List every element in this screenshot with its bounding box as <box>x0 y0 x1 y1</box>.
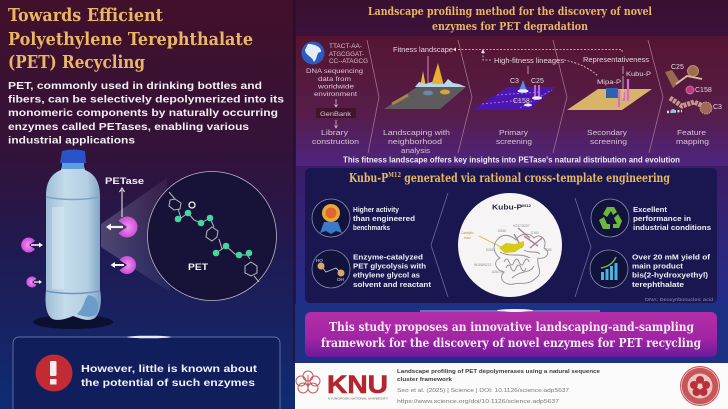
label: PETase <box>105 176 144 217</box>
benefit: glycolysis: OH <box>337 277 344 282</box>
icon: warning <box>36 354 72 392</box>
step: library construction: Library <box>321 128 348 137</box>
callout: little is known <box>13 336 280 409</box>
heading: Kubu-P M12: Kubu-P <box>349 171 388 185</box>
protein structure: Catalytic <box>461 231 474 235</box>
benefit: glycolysis <box>312 250 432 289</box>
icon: PET bottle <box>33 150 113 329</box>
benefit: industrial performance <box>591 199 711 237</box>
benefit: glycolysis: PET glycolysis with <box>353 264 426 270</box>
step: fitness landscape <box>383 47 466 155</box>
step: primary screening: Primary <box>499 128 528 137</box>
logo: KNU wordmark: KYUNGPOOK NATIONAL UNIVERSITY <box>328 396 388 400</box>
logo: university seal <box>680 366 720 406</box>
citation: Seo et al. (2025) | Science | DOI: 10.1126/science.adp5637 <box>397 388 569 394</box>
benefit: yield: main product <box>632 264 684 270</box>
step: library construction: DNA sequencing <box>306 68 363 75</box>
enzyme: PETase left <box>21 238 43 253</box>
step: fitness landscape: Fitness landscape <box>393 47 453 54</box>
panel: Kubu-P M12 <box>305 168 717 303</box>
protein structure: M12 <box>522 203 532 208</box>
benefit: industrial performance: Excellent <box>633 207 668 214</box>
step: primary screening: C3 <box>510 78 519 85</box>
benefit: yield: terephthalate <box>632 282 684 289</box>
heading: landscape profiling: enzymes for PET degradation <box>432 19 589 33</box>
conclusion band <box>295 304 728 363</box>
magnified PET molecule <box>148 172 276 300</box>
protein structure: T365 <box>544 248 552 252</box>
enzyme: PETase upper <box>106 217 138 238</box>
panel: right background <box>295 0 728 409</box>
title <box>8 5 253 73</box>
step: primary screening: C25 <box>531 78 544 85</box>
step: secondary screening: Mipa-P <box>597 79 621 86</box>
step: feature mapping: C25 <box>671 64 684 71</box>
panel: process workflow <box>296 36 728 166</box>
step: library construction <box>302 42 368 146</box>
step: feature mapping: C158 <box>695 87 712 94</box>
step: library construction: CC--ATAGCG <box>329 58 368 65</box>
enzyme: PETase lower <box>110 256 136 274</box>
intro text block <box>8 81 284 146</box>
flow: dashed lineage arrows: High-fitness lineages <box>494 58 565 65</box>
step: fitness landscape: Landscaping with <box>383 128 450 137</box>
step: secondary screening: Kubu-P <box>626 71 651 78</box>
footnote: DNA abbreviation: DNA: Deoxyribonucleic acid <box>645 297 713 303</box>
panel: left background <box>0 0 295 409</box>
benefit: glycolysis: HO <box>316 258 323 263</box>
magnified PET molecule: PET <box>188 262 208 273</box>
benefit: glycolysis: ethylene glycol as <box>353 272 420 280</box>
intro text block: PET, commonly used in drinking bottles and <box>8 81 262 92</box>
protein structure: D266 <box>498 229 506 233</box>
step: library construction: data from <box>318 76 351 83</box>
heading: landscape profiling: Landscape profiling method for the discovery of novel <box>368 4 653 18</box>
step: library construction: worldwide <box>317 84 354 90</box>
benefit: higher activity: Higher activity <box>353 207 399 214</box>
protein structure <box>458 193 562 297</box>
step: secondary screening <box>567 71 652 146</box>
protein structure: A267/S <box>492 270 504 274</box>
intro text block: industrial applications <box>8 136 135 146</box>
benefit: glycolysis: Enzyme-catalyzed <box>353 254 423 262</box>
step: secondary screening: Secondary <box>587 128 627 137</box>
citation <box>397 369 601 405</box>
step: feature mapping: Feature <box>677 128 706 137</box>
icon: globe <box>302 42 324 64</box>
caption: fitness landscape insight: This fitness landscape offers key insights into PETase's natural distribution and evolution <box>343 156 680 164</box>
label: PETase: PETase <box>105 176 144 186</box>
callout: little is known: However, little is known about <box>81 364 258 375</box>
step: primary screening <box>472 78 555 146</box>
footer <box>295 363 728 409</box>
benefit: industrial performance: industrial conditions <box>633 225 711 232</box>
intro text block: monomeric components by naturally occurring <box>8 108 278 119</box>
protein structure: W185/N212 <box>474 263 492 267</box>
benefit: higher activity: benchmarks <box>353 225 390 232</box>
benefit: yield <box>590 250 711 289</box>
title: (PET) Recycling <box>8 52 145 73</box>
flow: dashed lineage arrows: Representativeness <box>583 57 650 64</box>
step: feature mapping <box>665 64 722 146</box>
citation: https://www.science.org/doi/10.1126/science.adp5637 <box>397 399 559 405</box>
step: primary screening: screening <box>496 137 532 146</box>
step: library construction: TTACT-AA- <box>329 43 362 50</box>
step: primary screening: C158 <box>513 98 530 105</box>
callout: little is known: the potential of such enzymes <box>81 378 256 389</box>
protein structure: Kubu-P <box>492 202 519 212</box>
light beam from enzyme to magnifier <box>101 178 170 292</box>
heading: landscape profiling <box>368 4 653 33</box>
intro text block: fibers, can be selectively depolymerized into its <box>8 94 284 106</box>
step: library construction: GenBank <box>320 111 352 118</box>
flow: dashed lineage arrows <box>453 48 650 76</box>
citation: Landscape profiling of PET depolymerases using a natural sequence <box>397 369 601 375</box>
protein structure: H237/D207 <box>513 224 530 228</box>
intro text block: enzymes called PETases, enabling various <box>8 122 249 133</box>
benefit: higher activity: than engineered <box>353 216 415 223</box>
step: feature mapping: mapping <box>676 137 709 146</box>
protein structure: triad <box>464 236 471 240</box>
benefit: yield: Over 20 mM yield of <box>632 254 711 262</box>
protein structure: S160 <box>531 231 539 235</box>
enzyme: PETase small <box>26 276 42 288</box>
title: Towards Efficient <box>8 5 164 26</box>
citation: cluster framework <box>397 377 453 383</box>
benefit: higher activity <box>312 199 415 237</box>
step: library construction: ATGCGGAT- <box>329 51 364 58</box>
protein structure: D206 <box>486 248 494 252</box>
logo: KNU emblem <box>296 371 320 393</box>
logo: KNU wordmark: KNU <box>327 371 388 399</box>
step: library construction: environment <box>314 91 357 98</box>
step: fitness landscape: analysis <box>401 146 430 155</box>
heading: Kubu-P M12: M12 <box>388 171 401 179</box>
step: fitness landscape: neighborhood <box>388 137 442 146</box>
separator strip <box>293 0 296 363</box>
title: Polyethylene Terephthalate <box>8 29 253 50</box>
step: secondary screening: screening <box>590 137 627 146</box>
step: library construction: construction <box>312 137 359 146</box>
benefit: glycolysis: solvent and reactant <box>353 282 432 289</box>
step: feature mapping: C3 <box>713 104 722 111</box>
benefit: industrial performance: performance in <box>633 216 691 223</box>
benefit: yield: bis(2-hydroxyethyl) <box>632 272 708 280</box>
